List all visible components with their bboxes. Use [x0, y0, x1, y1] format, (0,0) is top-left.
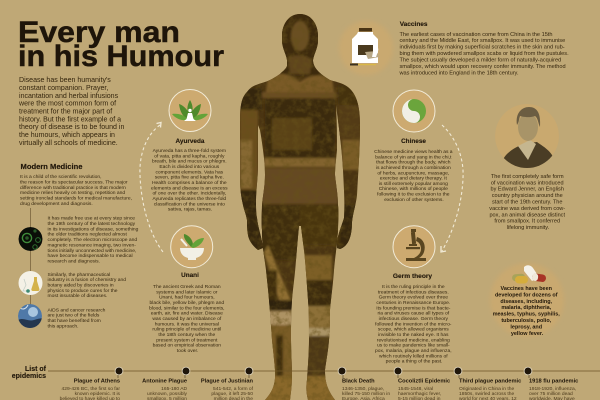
- unani heading: Unani: [181, 272, 199, 279]
- modern text: pharmaceutical: physics to produce cures for the: [48, 288, 118, 294]
- icon: pills: [512, 265, 546, 284]
- pills text: Vaccines have been: [501, 286, 552, 292]
- ayurveda text: classification of the universe into: [154, 201, 225, 207]
- ayurveda text: elements and disease is an excess: [151, 185, 228, 191]
- germ theory text: infectious disease. Germ theory: [379, 316, 449, 322]
- modern text: technology: tions initially unconnected with medicine,: [48, 248, 136, 254]
- marker: black death: [338, 367, 346, 378]
- epidemic: plague of justinian: Plague of Justinian: [201, 378, 254, 384]
- icon: mortar and leaves: [171, 226, 213, 268]
- epidemic: plague of justinian: plague, it left 25-50: [211, 391, 253, 397]
- epidemic: plague of athens: 429-426 BC, the first so far: [62, 386, 120, 392]
- arrow: dashed arc to germ theory: [441, 125, 463, 252]
- panel: edward jenner: [489, 104, 567, 231]
- icon: microscope: [393, 226, 435, 268]
- marker: 1918 flu pandemic: [524, 367, 532, 378]
- jenner text: country physician around the: [492, 193, 563, 199]
- intro text: were the most common form of: [18, 101, 116, 108]
- germ theory text: scope, which allowed organisms: [378, 327, 449, 333]
- germ theory text: which routinely killed millions of: [379, 353, 448, 359]
- modern text: aids and cancer: that have benefited from: [48, 318, 101, 324]
- panel: ayurveda: [151, 90, 229, 213]
- intro text: theory of disease is to be found in: [19, 124, 124, 131]
- unani text: earth, air, fire and water. Disease: [151, 311, 223, 317]
- human body silhouette: [235, 10, 365, 400]
- epidemic: 1918 flu pandemic: over 75 million dead: [529, 391, 573, 397]
- jenner text: The first completely safe form: [491, 174, 564, 180]
- modern text: technology: the older traditions neglected almost: [48, 232, 127, 238]
- germ theory text: centuries in Renaissance Europe.: [376, 300, 450, 306]
- ayurveda text: Health comprises a balance of the: [152, 180, 227, 186]
- jenner text: from smallpox. It conferred: [494, 219, 560, 225]
- chinese text: Chinese, with millions of people: [379, 186, 448, 192]
- ayurveda text: Ayurveda replicates the three-fold: [152, 196, 226, 202]
- ayurveda text: of one over the other. Incidentally,: [152, 191, 226, 197]
- pills text: developed for dozens of: [495, 292, 558, 298]
- icon: portrait of jenner: [495, 104, 559, 170]
- epidemic: antonine plague: Antonine Plague: [142, 378, 187, 384]
- panel: vaccines: [339, 21, 570, 76]
- chinese heading: Chinese: [401, 138, 426, 145]
- germ theory text: Germ theory evolved over three: [379, 295, 448, 301]
- germ theory text: Its founding premise is that bacte-: [376, 305, 451, 311]
- epidemic: third plague pandemic: Originated in China in the: [459, 386, 514, 392]
- chinese text: that flows through the body, which: [376, 160, 451, 166]
- epidemic: cocoliztli: 1545-1548, viral: [398, 386, 433, 392]
- modern medicine text: drug development and diagnosis.: [20, 201, 93, 207]
- germ theory text: revolutionised medicine, enabling: [377, 337, 450, 343]
- pills text: diseases, including,: [500, 299, 553, 305]
- germ theory text: followed the invention of the micro-: [375, 321, 452, 327]
- pills text: tuberculosis, polio,: [501, 318, 552, 324]
- ayurveda text: breath, bile and mucus or phlegm.: [152, 159, 227, 165]
- epidemic: black death: Black Death: [342, 378, 375, 384]
- unani text: Unani, had four humours,: [159, 295, 215, 301]
- epidemic: black death: [342, 378, 390, 400]
- jenner text: of vaccination was introduced: [491, 180, 564, 186]
- epidemic: black death: killed 75-150 million in: [342, 391, 390, 397]
- timeline heading: epidemics: [12, 373, 46, 380]
- intro text: Disease has been humanity's: [19, 77, 111, 84]
- chinese text: exercise and dietary therapy. It: [380, 176, 448, 182]
- chinese text: is still extremely popular among: [379, 181, 448, 187]
- germ theory text: ria and viruses cause all types of: [377, 311, 450, 317]
- jenner text: start of the 19th century. The: [492, 200, 562, 206]
- ayurveda text: seven, pitta five and kapha five.: [155, 175, 224, 181]
- modern text: aids and cancer: AIDS and cancer research: [48, 307, 106, 313]
- pills text: measles, typhus, syphilis,: [493, 312, 560, 318]
- unani text: blood, similar to the four elements,: [149, 305, 225, 311]
- modern text: technology: in its investigations of disease, something: [48, 226, 139, 232]
- pills text: leprosy, and: [510, 324, 542, 330]
- panel: vaccines have been developed: [490, 263, 564, 337]
- germ theory text: us to make pandemics like small-: [377, 343, 450, 349]
- modern medicine text: It is a child of the scientific revolution,: [20, 174, 102, 180]
- modern text: aids and cancer: this approach.: [48, 323, 79, 329]
- marker: cocoliztli: [394, 367, 402, 378]
- epidemic: antonine plague: 165-180 AD: [161, 386, 187, 392]
- ayurveda heading: Ayurveda: [176, 138, 205, 145]
- epidemic: cocoliztli: [398, 378, 450, 400]
- jenner text: vaccine was derived from cow-: [489, 206, 565, 212]
- intro text: constant companion. Prayer,: [19, 85, 108, 92]
- icon: lab flasks: [18, 271, 42, 295]
- modern text: technology: magnetic resonance imaging, two inven-: [48, 242, 136, 248]
- epidemic: plague of justinian: [201, 378, 254, 400]
- modern text: technology: the 19th century of the latest technology: [48, 221, 136, 227]
- epidemic: antonine plague: unknown, possibly: [147, 391, 188, 397]
- modern medicine heading: Modern Medicine: [20, 162, 82, 171]
- modern medicine text: setting ironclad standards for medical manufacture,: [20, 195, 132, 201]
- vaccines text: The earliest cases of vaccination come from China in the 15th: [400, 32, 552, 38]
- vaccines text: smallpox, which would upon recovery confer immunity. The method: [400, 64, 566, 70]
- germ theory text: pox, malaria, plague and influenza,: [375, 348, 452, 354]
- timeline: list of epidemics: [12, 366, 600, 400]
- title: in his Humour: [18, 40, 225, 73]
- icon: virus: [18, 227, 42, 251]
- chinese text: is achieved through a combination: [376, 165, 451, 171]
- epidemic: plague of athens: Plague of Athens: [74, 378, 120, 384]
- epidemic: third plague pandemic: Third plague pandemic: [459, 378, 521, 384]
- icon: cell research: [18, 304, 44, 328]
- modern medicine text: difference with traditional practice is that modern: [20, 185, 126, 191]
- germ theory heading: Germ theory: [393, 273, 432, 280]
- icon: vaccine bottle: [339, 21, 393, 75]
- modern text: technology: completely. The electron microscope and: [48, 237, 137, 243]
- epidemic: third plague pandemic: 1850s, swirled across the: [459, 391, 514, 397]
- epidemic: 1918 flu pandemic: [529, 378, 578, 400]
- vaccines text: The subject usually developed a milder form of naturally-acquired: [400, 58, 561, 64]
- title: Every man: [18, 16, 180, 49]
- epidemic: plague of athens: [60, 378, 121, 400]
- chinese text: following it to the exclusion to the: [377, 192, 450, 198]
- pills text: malaria, diphtheria,: [501, 305, 552, 311]
- panel: unani: [149, 226, 226, 354]
- modern text: pharmaceutical: most insurable of diseases.: [48, 293, 107, 299]
- marker: antonine plague: [182, 367, 190, 378]
- ayurveda text: component elements. Vata has: [155, 169, 224, 175]
- intro text: the humours, which appears in: [19, 132, 115, 139]
- unani text: the 18th century when the: [158, 332, 215, 338]
- vaccines text: individuals first by making superficial scratches in the skin and rub-: [400, 45, 565, 51]
- panel: modern medicine: [18, 162, 140, 329]
- germ theory text: invisible to the naked eye. It has: [378, 332, 449, 338]
- icon: yin yang: [393, 90, 435, 132]
- pills text: yellow fever.: [511, 331, 544, 337]
- unani text: present system of treatment: [156, 337, 218, 343]
- ayurveda text: Ayurveda has a three-fold system: [153, 148, 226, 154]
- unani text: ruling principle of medicine until: [152, 327, 221, 333]
- intro text: virtually all schools of medicine.: [19, 140, 118, 147]
- ayurveda text: sattva, rajas, tamas.: [168, 207, 212, 213]
- marker: third plague pandemic: [454, 367, 462, 378]
- marker: plague of athens: [115, 367, 123, 378]
- unani text: systems and later Islamic or: [156, 289, 218, 295]
- ayurveda text: of vata, pitta and kapha, roughly: [154, 153, 225, 159]
- vaccines text: bing them with powdered smallpox scabs or liquid from the pustules.: [400, 51, 569, 57]
- jenner text: by Edward Jenner, an English: [491, 187, 564, 193]
- arrow: dashed arc to ayurveda: [140, 122, 163, 252]
- panel: chinese: [374, 90, 454, 203]
- intro text: treatment for the major part of: [19, 108, 112, 115]
- modern medicine text: medicine relies heavily on testing, repetition and: [20, 190, 125, 196]
- title: [18, 16, 225, 73]
- unani text: based on empirical observation: [153, 343, 221, 349]
- panel: germ theory: [375, 226, 453, 365]
- vaccines text: was introduced into England in the 18th century.: [398, 70, 519, 76]
- germ theory text: It is the ruling principle in the: [382, 284, 445, 290]
- germ theory text: people a thing of the past.: [386, 359, 442, 365]
- timeline heading: List of: [25, 366, 47, 373]
- unani text: black bile, yellow bile, phlegm and: [149, 300, 224, 306]
- intro text: incantation and herbal infusions: [19, 93, 119, 100]
- epidemic: cocoliztli: haemorrhagic fever,: [398, 391, 441, 397]
- modern text: technology: have become indispensable to medical: [48, 253, 133, 259]
- modern text: pharmaceutical: Similarly, the pharmaceutical: [48, 272, 110, 278]
- epidemic: black death: 1346-1350, plague,: [342, 386, 384, 392]
- chinese text: Chinese medicine views health as a: [374, 149, 453, 155]
- unani text: humours. It was the universal: [155, 321, 219, 327]
- icon: ayurveda lotus figure: [169, 90, 211, 132]
- vaccines heading: Vaccines: [400, 21, 428, 28]
- modern text: pharmaceutical: botany aided by discoveries in: [48, 282, 114, 288]
- germ theory text: treatment of infectious diseases.: [378, 289, 449, 295]
- chinese text: exclusion of other systems.: [384, 197, 444, 203]
- modern text: aids and cancer: are just two of the fields: [48, 313, 100, 319]
- epidemic: antonine plague: [142, 378, 188, 400]
- marker: plague of justinian: [245, 367, 253, 378]
- epidemic: 1918 flu pandemic: 1918-1920, influenza,: [529, 386, 576, 392]
- jenner text: pox, an animal disease distinct: [489, 212, 565, 218]
- intro text: history. But the first example of a: [19, 116, 121, 123]
- epidemic: 1918 flu pandemic: 1918 flu pandemic: [529, 378, 578, 384]
- epidemic: plague of justinian: 541-542, a form of: [213, 386, 254, 392]
- unani text: The ancient Greek and Roman: [153, 284, 221, 290]
- unani text: was caused by an imbalance of: [152, 316, 222, 322]
- modern medicine text: the reason for its spectacular success. The major: [20, 179, 128, 185]
- vaccines text: century and the Middle East, for smallpox. It was used to immunise: [400, 38, 565, 44]
- epidemic: plague of athens: known epidemic. It is: [75, 391, 121, 397]
- epidemic: third plague pandemic: [459, 378, 521, 400]
- ayurveda text: Each is divided into various: [159, 164, 220, 170]
- modern text: technology: It has made free use at every step since: [48, 216, 135, 222]
- modern text: technology: research and diagnosis.: [48, 258, 100, 264]
- jenner text: lifelong immunity.: [507, 225, 550, 231]
- epidemic: cocoliztli: Cocoliztli Epidemic: [398, 378, 450, 384]
- chinese text: of herbs, acupuncture, massage,: [377, 170, 449, 176]
- unani text: took over.: [177, 348, 198, 354]
- modern text: pharmaceutical: industry is a fusion of chemistry and: [48, 277, 126, 283]
- chinese text: balance of yin and yang in the chi,t: [375, 154, 452, 160]
